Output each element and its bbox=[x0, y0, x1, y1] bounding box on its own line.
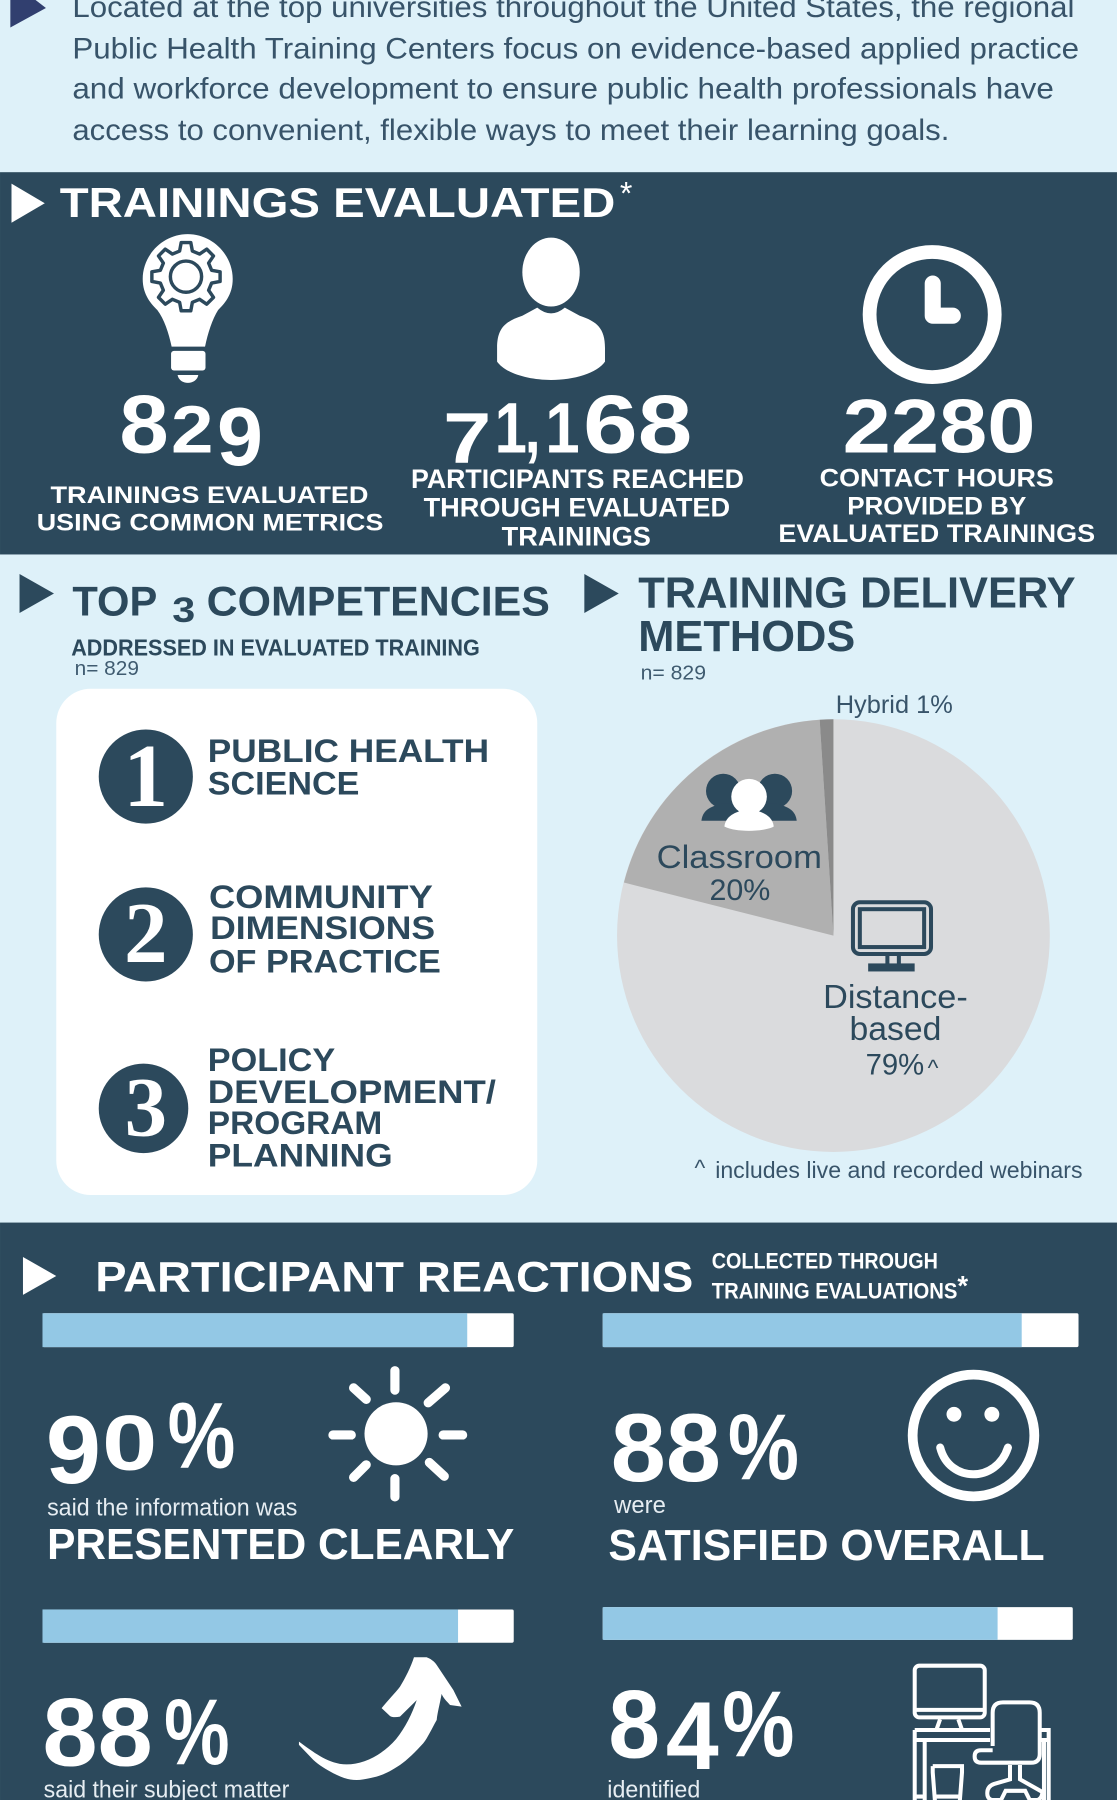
heading: training delivery methods bbox=[638, 569, 1076, 661]
label: trainings evaluated bbox=[37, 482, 383, 536]
label: participants reached: PARTICIPANTS REACHED bbox=[411, 464, 744, 494]
stat: 84%: % bbox=[722, 1671, 794, 1776]
stat: 88% satisfied bbox=[611, 1395, 799, 1502]
competency 2: COMMUNITY bbox=[209, 879, 433, 915]
competency 2: 2 bbox=[124, 884, 168, 981]
stat: 84%: 8 bbox=[608, 1672, 660, 1779]
competency 3: 3 bbox=[125, 1060, 167, 1154]
footnote: includes live and recorded webinars bbox=[715, 1157, 1083, 1183]
label: contact hours: CONTACT HOURS bbox=[820, 465, 1054, 493]
heading: training delivery methods: METHODS bbox=[638, 613, 855, 661]
text: said the information was: said the information was bbox=[47, 1494, 297, 1521]
heading: training delivery methods: TRAINING DELIVERY bbox=[638, 569, 1076, 617]
stat: 90%: 0 bbox=[102, 1398, 157, 1486]
label: classroom: Classroom bbox=[657, 839, 822, 875]
stat: 88% satisfied: 88 bbox=[611, 1395, 721, 1502]
stat: 90%: 9 bbox=[46, 1397, 101, 1504]
panel: trainings evaluated bbox=[0, 172, 1117, 554]
stat: 84%: 4 bbox=[666, 1683, 719, 1790]
competency 3: POLICY bbox=[208, 1042, 335, 1078]
label: participants reached: THROUGH EVALUATED bbox=[424, 493, 730, 523]
stat: 88% subject matter: 88 bbox=[42, 1680, 153, 1787]
label: classroom: 20% bbox=[709, 874, 770, 907]
competency 1: SCIENCE bbox=[208, 765, 359, 801]
competency 3: DEVELOPMENT/ bbox=[208, 1074, 496, 1110]
icon: heading triangle bbox=[584, 574, 619, 613]
label: trainings evaluated: USING COMMON METRICS bbox=[37, 509, 383, 536]
stat: 84% bbox=[608, 1671, 794, 1790]
icon: sun bbox=[333, 1371, 463, 1497]
icon: heading triangle bbox=[20, 574, 54, 613]
panel: intro bbox=[10, 0, 1079, 147]
competency 1: 1 bbox=[123, 727, 168, 826]
sample size: n= 829 bbox=[75, 657, 139, 680]
stat: 88% subject matter: % bbox=[164, 1679, 230, 1784]
sample size: n= 829 bbox=[641, 662, 706, 685]
stat: 88% subject matter bbox=[42, 1679, 230, 1787]
competency 3: PLANNING bbox=[208, 1137, 393, 1173]
icon: monitor bbox=[853, 902, 931, 969]
bar: identified 84% bbox=[603, 1607, 1073, 1640]
label: distance-based bbox=[823, 979, 968, 1081]
heading: top 3 competencies: COMPETENCIES bbox=[207, 578, 550, 624]
stat: 71,168: 68 bbox=[583, 377, 692, 470]
stat: 71,168: 1 bbox=[495, 389, 527, 468]
panel: participant reactions bbox=[0, 1223, 1117, 1800]
icon: light bulb with gear bbox=[143, 234, 233, 383]
stat: 71,168 bbox=[443, 377, 692, 479]
heading: trainings evaluated: TRAININGS EVALUATED bbox=[60, 180, 615, 226]
intro text: and workforce development to ensure public health professionals have bbox=[72, 73, 1054, 106]
competency 2 bbox=[99, 879, 441, 982]
icon: curved arrow bbox=[299, 1657, 462, 1780]
icon: clock bbox=[870, 252, 995, 377]
heading: top 3 competencies bbox=[72, 578, 550, 630]
label: hybrid: Hybrid 1% bbox=[836, 691, 953, 719]
stat: 90% bbox=[46, 1383, 235, 1504]
icon: intro triangle bbox=[10, 0, 46, 28]
icon: classroom people bbox=[701, 774, 797, 831]
stat: 71,168: 1 bbox=[545, 389, 580, 468]
bar: subject matter 88% bbox=[42, 1609, 514, 1643]
icon: desk and chair bbox=[915, 1666, 1049, 1800]
label: distance-based: 79% bbox=[866, 1048, 924, 1081]
icon: heading triangle bbox=[23, 1257, 56, 1295]
competency 2: OF PRACTICE bbox=[209, 943, 441, 979]
stat: 90%: % bbox=[168, 1383, 235, 1488]
heading: top 3 competencies: 3 bbox=[172, 590, 195, 630]
label: contact hours: EVALUATED TRAININGS bbox=[778, 520, 1095, 548]
stat: 829: 2 bbox=[171, 393, 214, 467]
label: distance-based: Distance- bbox=[823, 979, 968, 1016]
bar: satisfied overall 88% bbox=[603, 1313, 1079, 1347]
subheading bbox=[712, 1248, 968, 1303]
icon: person bbox=[497, 238, 605, 380]
asterisk: * bbox=[620, 175, 632, 211]
panel: training delivery methods bbox=[584, 569, 1083, 1183]
label: distance-based: ^ bbox=[928, 1055, 939, 1081]
icon: heading triangle bbox=[11, 184, 45, 223]
stat: 829 bbox=[119, 377, 263, 483]
label: contact hours bbox=[778, 465, 1095, 548]
subheading: ADDRESSED IN EVALUATED TRAINING bbox=[71, 634, 480, 660]
competency 3 bbox=[99, 1042, 496, 1173]
stat: 88% satisfied: % bbox=[728, 1395, 799, 1500]
intro text bbox=[72, 0, 1079, 147]
footnote: ^ bbox=[695, 1155, 706, 1181]
subheading: * bbox=[957, 1270, 968, 1301]
stat: 71,168: 7 bbox=[443, 400, 491, 479]
competency 1: PUBLIC HEALTH bbox=[208, 733, 489, 769]
pie chart bbox=[617, 719, 1050, 1152]
label: contact hours: PROVIDED BY bbox=[847, 492, 1026, 520]
label: participants reached bbox=[411, 464, 744, 551]
card: competency list bbox=[56, 689, 537, 1195]
text: satisfied overall: SATISFIED OVERALL bbox=[608, 1522, 1045, 1570]
subheading: TRAINING EVALUATIONS bbox=[712, 1278, 957, 1303]
stat: 829: 9 bbox=[217, 390, 263, 483]
icon: smiley bbox=[913, 1375, 1034, 1496]
stat: 2280: 2280 bbox=[843, 384, 1035, 469]
subheading: COLLECTED THROUGH bbox=[712, 1248, 938, 1273]
heading: participant reactions: PARTICIPANT REACTIONS bbox=[95, 1253, 693, 1300]
heading: top 3 competencies: TOP bbox=[72, 578, 157, 624]
text: were: were bbox=[613, 1492, 666, 1519]
bar: presented clearly 90% bbox=[42, 1313, 514, 1347]
text: presented clearly: PRESENTED CLEARLY bbox=[47, 1521, 514, 1569]
competency 2: DIMENSIONS bbox=[210, 910, 435, 946]
panel: top 3 competencies bbox=[20, 574, 550, 1195]
stat: 71,168: , bbox=[525, 389, 541, 468]
label: trainings evaluated: TRAININGS EVALUATED bbox=[51, 482, 369, 509]
intro text: Public Health Training Centers focus on evidence-based applied practice bbox=[72, 33, 1079, 66]
label: distance-based: based bbox=[850, 1011, 941, 1048]
label: participants reached: TRAININGS bbox=[502, 521, 651, 551]
label: classroom bbox=[657, 839, 822, 907]
competency 1 bbox=[99, 727, 489, 826]
intro text: access to convenient, flexible ways to meet their learning goals. bbox=[72, 114, 949, 147]
competency 3: PROGRAM bbox=[208, 1105, 382, 1141]
stat: 829: 8 bbox=[119, 377, 169, 470]
